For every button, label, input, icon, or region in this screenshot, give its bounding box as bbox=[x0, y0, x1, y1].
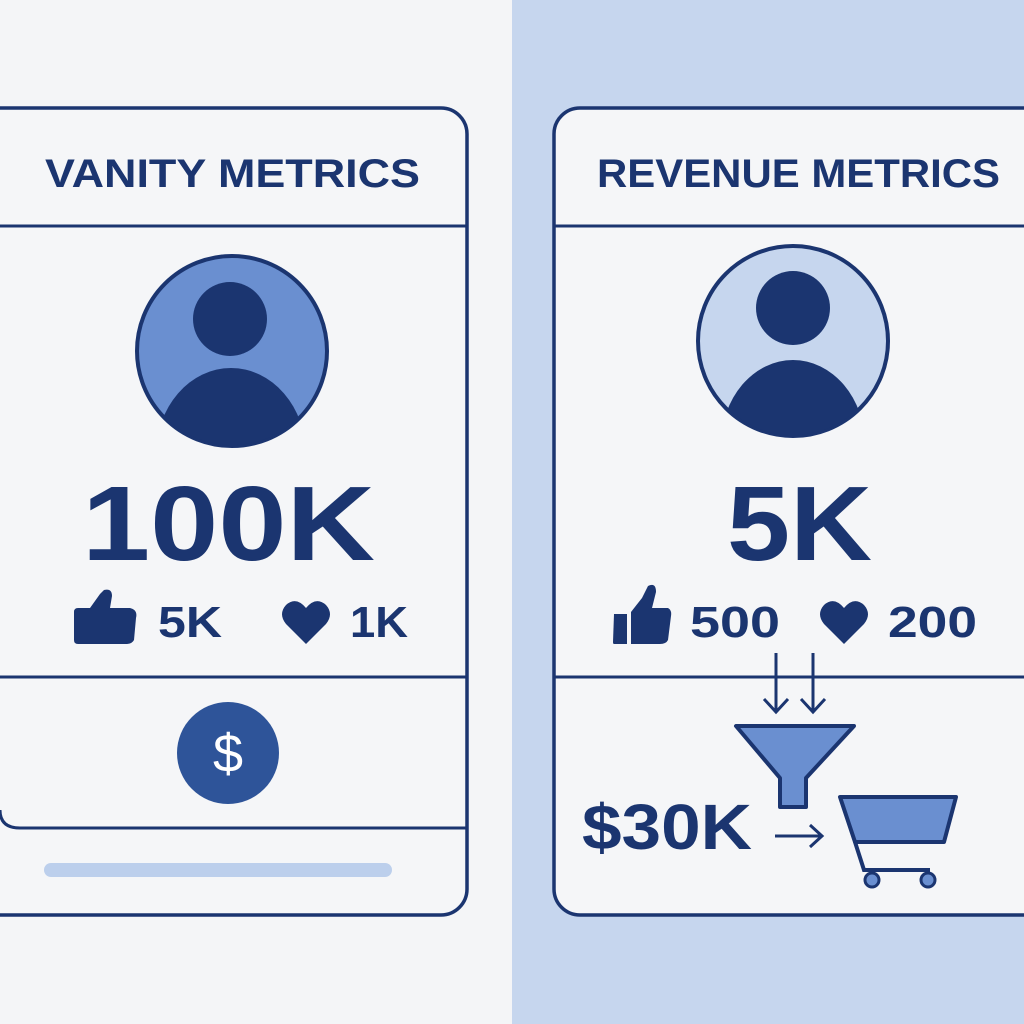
engagement row: 200 bbox=[888, 598, 977, 647]
followers number: 100K bbox=[82, 465, 375, 583]
heading: revenue metrics: REVENUE METRICS bbox=[597, 152, 1000, 196]
engagement row: 1K bbox=[350, 598, 408, 647]
engagement row bbox=[74, 590, 408, 647]
engagement row: 500 bbox=[690, 598, 780, 647]
heading: vanity metrics: VANITY METRICS bbox=[45, 152, 420, 196]
engagement row: 5K bbox=[158, 598, 222, 647]
engagement row bbox=[613, 585, 977, 647]
icon: avatar bbox=[696, 244, 890, 438]
panel: revenue metrics bbox=[554, 108, 1024, 915]
icon: funnel bbox=[736, 726, 854, 807]
icon: cart bbox=[840, 797, 956, 887]
progress bar bbox=[44, 863, 392, 877]
followers number: 5K bbox=[727, 465, 872, 583]
revenue number: $30K bbox=[582, 791, 752, 863]
arrow to cart bbox=[775, 825, 822, 847]
icon: dollar coin: $ bbox=[213, 724, 243, 784]
icon: avatar bbox=[135, 254, 329, 448]
icon: dollar coin bbox=[177, 702, 279, 804]
arrows into funnel bbox=[764, 653, 825, 712]
panel: vanity metrics bbox=[0, 108, 467, 915]
